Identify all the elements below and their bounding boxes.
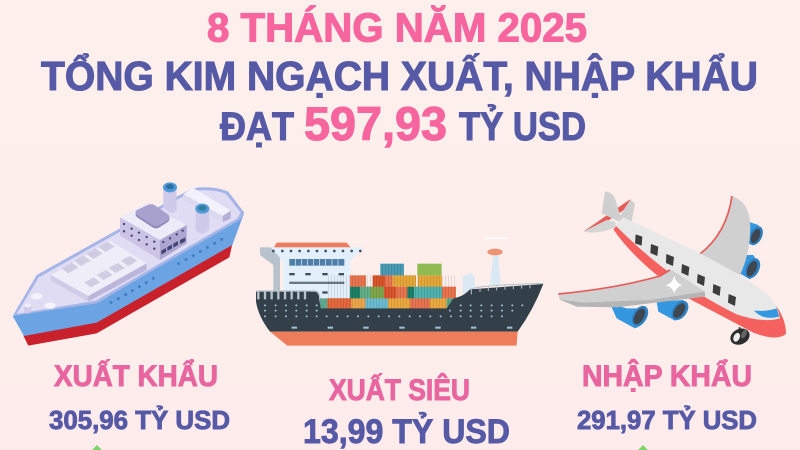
icon: green up arrow export [91,445,103,450]
title: 8 THÁNG NĂM 2025 [207,4,587,50]
stat: trade surplus: 13,99 TỶ USD [303,413,510,450]
stat: import [577,359,757,435]
title: TỶ USD [459,105,586,149]
icon: container ship (trade surplus) [256,238,543,346]
containers [320,264,456,309]
title: TỔNG KIM NGẠCH XUẤT, NHẬP KHẨU [41,52,758,99]
icon: isometric ship (export) [13,182,244,346]
title: 597,93 [304,97,447,150]
stat: import: 291,97 TỶ USD [577,405,757,435]
stat: import: NHẬP KHẨU [582,359,752,393]
engines [737,222,766,281]
stat: export [49,359,230,435]
stat: export: 305,96 TỶ USD [49,405,230,435]
stat: export: XUẤT KHẨU [54,359,218,393]
icon: green up arrow import [637,445,649,450]
icon: airplane (import) [558,192,786,348]
title: ĐẠT [220,105,294,149]
title [41,4,758,150]
stat: trade surplus [303,373,510,450]
stat: trade surplus: XUẤT SIÊU [329,373,470,407]
